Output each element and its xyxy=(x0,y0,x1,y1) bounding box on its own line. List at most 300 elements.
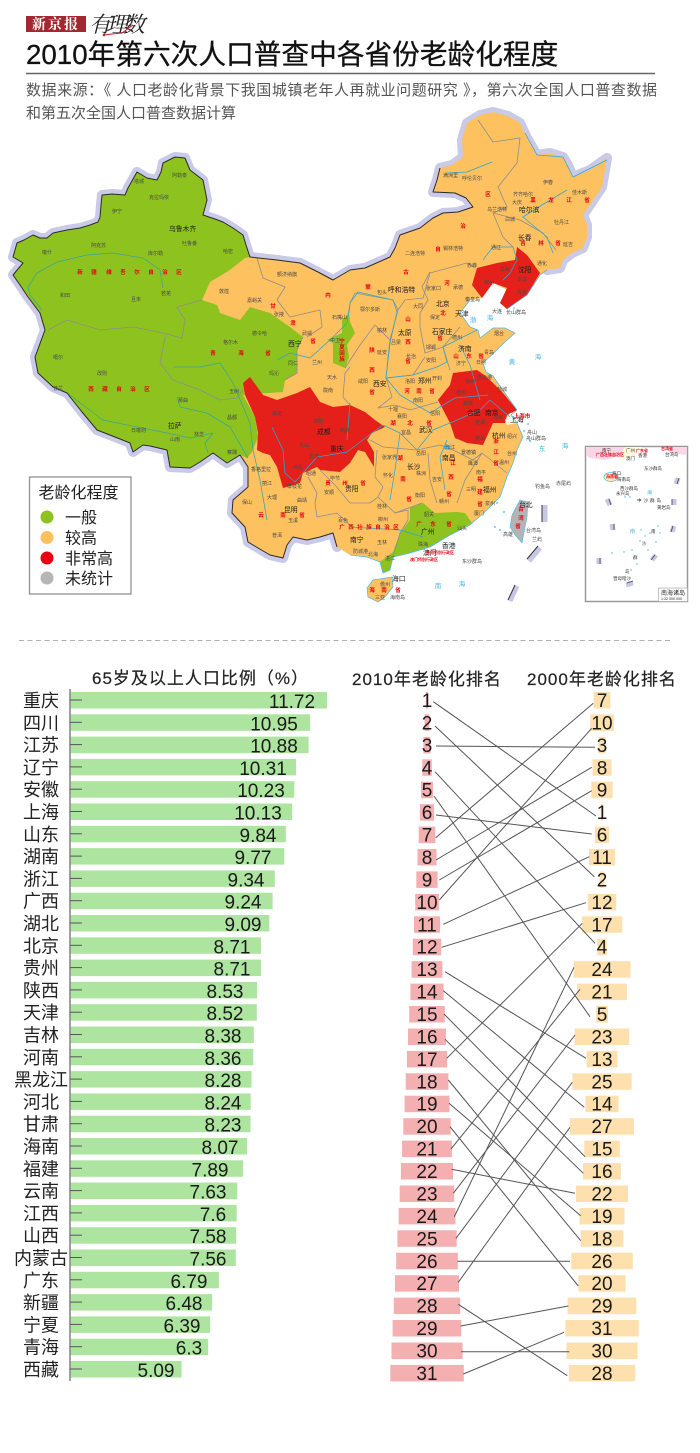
province labels: 湖南 xyxy=(23,847,59,867)
rank 2010 numbers: 8 xyxy=(422,848,432,869)
value labels: 10.88 xyxy=(250,737,298,758)
map: city labels: 赣州 xyxy=(439,498,449,505)
inset map: South China Sea islands: 广西壮族自治区 xyxy=(596,451,624,457)
value labels: 10.23 xyxy=(237,781,285,802)
rank 2010 numbers: 23 xyxy=(416,1184,438,1206)
inset map: South China Sea islands: 澳门 xyxy=(626,455,635,462)
map: city labels: 长沙 xyxy=(407,462,421,471)
value labels: 5.09 xyxy=(138,1361,174,1382)
province labels: 天津 xyxy=(23,1003,59,1023)
rank 2010 numbers: 4 xyxy=(422,758,433,779)
map: city labels: 库尔勒 xyxy=(148,250,163,257)
map land: higher aged provinces (orange) xyxy=(13,112,607,573)
map: province names in red: 云 xyxy=(258,512,264,519)
map: province names in red: 南 xyxy=(416,387,422,395)
rank 2000 numbers: 27 xyxy=(591,1117,613,1138)
map: province names in red: 自 xyxy=(116,385,122,393)
value labels: 11.72 xyxy=(269,692,315,713)
map: city labels: 沈阳 xyxy=(518,265,532,274)
map: sea labels xyxy=(435,313,569,590)
logo: newspaper masthead xyxy=(26,12,150,37)
map: province names in red: 西 xyxy=(448,474,454,481)
map: city labels: 山南 xyxy=(170,436,180,443)
value labels: 6.39 xyxy=(164,1316,200,1337)
logo: newspaper masthead: 新京报 xyxy=(32,16,80,33)
map: city labels: 德州 xyxy=(452,334,462,341)
map: province names in red: 省 xyxy=(299,511,305,519)
map: city labels xyxy=(42,172,587,601)
rank 2010 numbers: 26 xyxy=(416,1252,438,1273)
inset map: South China Sea islands: 永兴岛 xyxy=(616,490,630,497)
map: city labels: 景德镇 xyxy=(461,449,476,456)
map: city labels: 普洱 xyxy=(272,532,282,539)
map: province names in red: 尔 xyxy=(134,268,140,276)
map: province names in red: 省 xyxy=(369,388,375,396)
map: province names in red: 东 xyxy=(430,520,436,528)
map: province names in red: 龙 xyxy=(548,196,554,204)
inset map: South China Sea islands: 海 xyxy=(647,489,652,496)
map: sea labels: 渤 xyxy=(470,315,477,324)
map: city labels: 太原 xyxy=(398,328,412,337)
map: province names in red: 吉 xyxy=(520,239,526,247)
legend item: higher: 较高 xyxy=(65,530,97,548)
map: province names in red: 内 xyxy=(325,291,331,299)
map: city labels: 南京 xyxy=(485,408,499,417)
map: province names in red: 甘 xyxy=(270,302,276,310)
map: city labels: 额济纳旗 xyxy=(277,271,297,278)
value labels: 8.07 xyxy=(202,1138,238,1159)
map: city labels: 防城港 xyxy=(353,548,368,555)
map: province names in red: 吾 xyxy=(120,269,126,276)
province labels: 江苏 xyxy=(23,736,59,756)
map: city labels: 长治 xyxy=(406,353,416,360)
map: land border line xyxy=(13,157,473,558)
map: city labels: 昆明 xyxy=(284,506,298,514)
map: city labels: 三明 xyxy=(466,487,476,493)
province labels: 湖北 xyxy=(23,914,59,934)
map: province names in red: 治 xyxy=(130,385,136,393)
province labels: 贵州 xyxy=(23,959,59,979)
map: city labels: 锦州 xyxy=(484,279,494,286)
map: city labels: 香格里拉 xyxy=(251,466,271,473)
map: city labels: 陇南 xyxy=(323,387,333,394)
rank 2010 numbers: 20 xyxy=(416,1117,438,1138)
rank 2010 numbers: 7 xyxy=(422,826,432,847)
map: province names in red: 江 xyxy=(450,459,456,467)
value labels: 7.89 xyxy=(192,1160,228,1181)
map: province names in red: 贵 xyxy=(325,479,331,487)
map: province names in red: 省 xyxy=(265,349,271,357)
province labels xyxy=(14,691,68,1380)
map: province names in red: 西 xyxy=(348,524,354,531)
map: province names in red: 省 xyxy=(429,387,435,395)
map: province names in red: 区 xyxy=(393,524,399,531)
map: city labels: 天水 xyxy=(327,374,337,381)
map: city labels: 北海 xyxy=(368,551,378,558)
map: city labels: 汕头 xyxy=(457,525,467,532)
map: city labels: 舟山 xyxy=(527,429,537,436)
map: city labels: 大理 xyxy=(267,494,277,501)
map: city labels: 西宁 xyxy=(288,339,302,348)
map: city labels: 伊宁 xyxy=(112,208,122,215)
inset map: South China Sea islands: 沙 xyxy=(642,541,647,546)
map: city labels: 怀化 xyxy=(383,472,393,479)
rank 2000 numbers: 6 xyxy=(597,826,607,847)
map: province names in red: 河 xyxy=(404,387,410,395)
map: province names in red: 治 xyxy=(162,268,168,276)
map: province names in red: 浙 xyxy=(493,437,499,445)
value labels: 8.71 xyxy=(214,960,250,981)
axis and ticks xyxy=(70,689,82,1381)
map: province names in red: 省 xyxy=(584,196,590,204)
inset map: South China Sea islands: 南 xyxy=(630,528,635,535)
value labels: 8.23 xyxy=(205,1116,241,1137)
rank 2000 numbers: 3 xyxy=(597,736,607,757)
rank 2010 numbers: 24 xyxy=(416,1207,438,1228)
map: province names in red: 香港特别行政区 xyxy=(426,549,454,555)
map: province names in red: 陕 xyxy=(369,346,375,354)
map: province names in red: 西 xyxy=(369,367,375,374)
map: city labels: 北京 xyxy=(436,299,450,308)
map: city labels: 台北 xyxy=(519,500,533,509)
map: city labels: 重庆 xyxy=(330,444,344,453)
map: city labels: 林芝 xyxy=(194,431,204,438)
province labels: 江西 xyxy=(23,1204,59,1224)
map: province names in red: 区 xyxy=(176,269,182,276)
province labels: 内蒙古 xyxy=(14,1248,68,1268)
map: city labels: 黄山 xyxy=(475,435,485,442)
map: city labels: 通辽 xyxy=(491,244,501,251)
rank 2000 numbers: 29 xyxy=(591,1297,613,1318)
map: city labels: 岳阳 xyxy=(416,450,426,457)
rank 2010 numbers xyxy=(416,691,438,1385)
map: city labels: 柳州 xyxy=(378,516,388,523)
province labels: 广西 xyxy=(23,892,59,912)
map: province names in red: 省 xyxy=(493,459,499,467)
rank 2000 numbers: 20 xyxy=(591,1274,613,1295)
legend item: not counted: 未统计 xyxy=(65,570,113,588)
value labels: 7.63 xyxy=(190,1183,226,1204)
inset map: South China Sea islands: 东沙群岛 xyxy=(644,465,662,472)
map: province names in red: 自 xyxy=(375,523,381,531)
map: city labels: 南昌 xyxy=(442,453,456,462)
map: city labels: 呼伦贝尔 xyxy=(462,175,482,182)
map: province names in red: 福 xyxy=(477,475,483,483)
rank 2010 numbers: 30 xyxy=(416,1342,438,1362)
inset map: South China Sea islands: 海南岛 xyxy=(617,476,631,483)
rank 2000 numbers: 14 xyxy=(591,1095,613,1116)
map: province names in red: 西 xyxy=(405,339,411,346)
map: city labels: 拉萨 xyxy=(168,421,182,430)
rank 2010 numbers: 11 xyxy=(417,915,437,936)
map: city labels: 温州 xyxy=(499,459,509,466)
map: city labels: 中卫 xyxy=(330,337,340,344)
legend: ageing level: 老龄化程度 xyxy=(38,484,119,502)
map: city labels: 玛沁 xyxy=(269,370,279,377)
rank 2000 numbers: 18 xyxy=(591,1229,613,1250)
map: city labels: 蚌埠 xyxy=(463,400,473,407)
map: province names in red: 族 xyxy=(366,523,372,531)
map: province names in red: 治 xyxy=(460,222,466,230)
map: city labels: 绍兴 xyxy=(507,433,517,440)
map: city labels: 和田 xyxy=(60,292,70,299)
rank 2000 numbers: 5 xyxy=(597,1005,607,1026)
map: sea labels: 海 xyxy=(459,579,466,588)
map: province names in red: 山 xyxy=(405,315,411,323)
map: province names in red: 回 xyxy=(339,350,345,357)
map: province names in red: 广 xyxy=(339,523,345,531)
map: city labels: 佳木斯 xyxy=(572,189,587,196)
inset map: South China Sea islands: 南 xyxy=(651,528,656,534)
inset map: South China Sea islands: 南宁 xyxy=(602,447,611,453)
map: province names in red: 台 xyxy=(518,505,524,513)
map: province names in red: 黑 xyxy=(530,197,536,204)
map: city labels: 鄂尔多斯 xyxy=(360,306,380,313)
rank 2010 numbers: 2 xyxy=(422,713,432,734)
legend item: ordinary: 一般 xyxy=(65,509,97,527)
map: city labels: 通化 xyxy=(537,260,547,267)
map: province names in red: 东 xyxy=(466,352,472,360)
map: city labels: 连云港 xyxy=(477,374,492,381)
map: city labels: 阿克苏 xyxy=(91,242,106,249)
map: city labels: 哈密 xyxy=(223,248,233,255)
map: city labels: 福州 xyxy=(483,485,497,494)
map: city labels: 株洲 xyxy=(416,470,426,477)
rank 2010 numbers: 10 xyxy=(416,893,438,914)
value labels: 6.48 xyxy=(166,1294,202,1315)
map: city labels: 吐鲁番 xyxy=(182,240,197,247)
rank 2010 numbers: 19 xyxy=(416,1095,438,1116)
map: city labels: 大庆 xyxy=(512,199,522,206)
map: city labels: 日喀则 xyxy=(131,427,146,434)
map: province names in red: 上海市 xyxy=(514,412,531,420)
province labels: 浙江 xyxy=(23,869,59,889)
rank 2010 numbers: 5 xyxy=(422,781,432,802)
map: city labels: 百色 xyxy=(338,517,348,524)
map: city labels: 鹰潭 xyxy=(468,460,478,467)
province labels: 山东 xyxy=(23,825,59,845)
province labels: 四川 xyxy=(23,713,59,733)
rank 2000 numbers: 31 xyxy=(591,1319,613,1340)
map: city labels: 曲靖 xyxy=(297,497,307,504)
title: 2010年第六次人口普查中各省份老龄化程度 xyxy=(26,39,558,70)
map: city labels: 苏州 xyxy=(493,414,503,421)
map: city labels: 韶关 xyxy=(424,511,434,518)
map: province names in red: 南 xyxy=(400,475,406,483)
map: province names in red: 南 xyxy=(381,586,387,594)
province labels: 青海 xyxy=(23,1338,59,1358)
rank 2000 numbers: 2 xyxy=(597,870,607,891)
map: province names in red: 蒙 xyxy=(365,283,371,291)
province labels: 甘肃 xyxy=(23,1115,59,1135)
map: city labels: 克拉玛依 xyxy=(149,194,169,201)
value labels: 8.24 xyxy=(205,1093,242,1114)
source note: 数据来源：《 人口老龄化背景下我国城镇老年人再就业问题研究 》，第六次全国人口普查数据 xyxy=(26,81,657,99)
value labels: 6.79 xyxy=(171,1272,207,1293)
map: province names in red: 肃 xyxy=(290,319,296,327)
inset map: South China Sea islands: 台湾岛 xyxy=(665,451,679,458)
map: city labels: 赤峰 xyxy=(467,262,477,269)
map: province names in red: 州 xyxy=(342,480,348,487)
province labels: 吉林 xyxy=(23,1026,59,1046)
map: province names in red: 林 xyxy=(538,239,544,247)
map: city labels: 张家界 xyxy=(382,454,397,461)
province labels: 辽宁 xyxy=(23,758,59,778)
rank 2010 numbers: 28 xyxy=(416,1297,438,1318)
map: city labels: 台湾岛 xyxy=(526,527,541,534)
map: city labels: 西昌 xyxy=(293,465,303,471)
map: city labels: 桂林 xyxy=(377,503,387,510)
province labels: 黑龙江 xyxy=(14,1070,68,1090)
map: city labels: 徐州 xyxy=(465,378,475,385)
map: province names in red: 省 xyxy=(405,357,411,365)
legend item: very high: 非常高 xyxy=(65,550,113,568)
rank 2010 numbers: 25 xyxy=(416,1229,438,1250)
province labels: 新疆 xyxy=(23,1293,59,1313)
map: city labels: 大同 xyxy=(413,303,423,310)
inset map: South China Sea islands: 群 xyxy=(633,554,638,561)
value labels: 9.77 xyxy=(235,848,271,869)
map: city labels: 乐山 xyxy=(299,442,309,449)
map: rivers xyxy=(28,133,607,573)
map: city labels: 丽江 xyxy=(262,480,272,487)
rank 2000 numbers: 30 xyxy=(591,1342,613,1362)
map: city labels: 呼和浩特 xyxy=(388,285,415,294)
rank 2010 numbers: 22 xyxy=(416,1162,438,1183)
map: city labels: 西安 xyxy=(373,379,387,388)
value labels: 9.24 xyxy=(225,893,262,914)
value labels: 8.36 xyxy=(205,1049,241,1070)
province labels: 福建 xyxy=(23,1159,59,1179)
rank 2000 numbers: 15 xyxy=(591,1140,613,1161)
map: city labels: 塔城 xyxy=(134,178,144,185)
rank 2000 heading: 2000年老龄化排名 xyxy=(527,670,677,689)
map: city labels: 衡阳 xyxy=(415,492,425,499)
inset map: South China Sea islands: 中沙群岛 xyxy=(637,497,663,504)
map: city labels: 大连 xyxy=(492,308,502,315)
value labels: 6.3 xyxy=(176,1339,202,1360)
map: province names in red: 省 xyxy=(310,337,316,345)
province labels: 北京 xyxy=(23,936,59,956)
map: province names in red: 省 xyxy=(515,522,521,530)
map: city labels: 兰屿 xyxy=(532,536,542,543)
map: city labels: 长山群岛 xyxy=(506,309,526,316)
rank 2000 numbers: 1 xyxy=(597,803,607,824)
map: Anhui and Jiangsu red xyxy=(438,370,517,445)
map: province names in red: 西 xyxy=(88,386,94,393)
map: Guangdong green xyxy=(380,503,472,573)
value labels: 8.52 xyxy=(207,1004,243,1025)
rank 2010 numbers: 15 xyxy=(416,1005,438,1026)
map: province names in red: 自 xyxy=(435,245,441,253)
map: city labels: 玉林 xyxy=(377,539,387,546)
map: city labels: 安阳 xyxy=(426,357,436,364)
map: city labels: 成都 xyxy=(317,427,331,436)
map: city labels: 乌鲁木齐 xyxy=(169,224,196,233)
map: city labels: 满洲里 xyxy=(443,172,458,179)
province labels: 海南 xyxy=(23,1137,59,1157)
map: sea labels: 南 xyxy=(435,581,442,590)
map: city labels: 上海 xyxy=(510,415,524,424)
rank 2000 numbers: 25 xyxy=(591,1072,613,1093)
map: city labels: 丹东 xyxy=(517,289,527,296)
map: city labels: 石家庄 xyxy=(432,327,453,336)
map: city labels: 南宁 xyxy=(350,535,364,544)
map: Sichuan and Chongqing red xyxy=(243,377,385,488)
map: province borders xyxy=(48,120,556,557)
map: province names in red: 省 xyxy=(555,239,561,247)
map: city labels: 南平 xyxy=(476,469,486,476)
inset map: South China Sea islands: 广东省 xyxy=(636,447,648,453)
map: city labels: 绵阳 xyxy=(313,418,323,425)
map: province names in red: 建 xyxy=(477,488,483,496)
map: city labels: 阜新 xyxy=(500,266,510,273)
map: city labels: 喀什 xyxy=(42,249,52,256)
map: city labels: 珠海 xyxy=(418,541,428,548)
rank change connector lines xyxy=(433,702,596,1376)
map: city labels: 伊春 xyxy=(543,179,553,186)
map: city labels: 武威 xyxy=(302,330,312,337)
logo: newspaper masthead: 有理数 xyxy=(88,12,150,37)
rank 2000 numbers: 28 xyxy=(591,1364,613,1385)
map: city labels: 湛江 xyxy=(385,555,395,562)
map: province names in red: 青 xyxy=(210,349,216,357)
map: city labels: 那曲 xyxy=(178,397,188,404)
map: city labels: 且末 xyxy=(131,296,141,303)
rank 2000 numbers: 16 xyxy=(591,1162,613,1183)
map: city labels: 阿勒泰 xyxy=(172,172,187,179)
inset map: South China Sea islands: 海南省 xyxy=(606,473,618,479)
inset map: South China Sea islands: 1:32 000 000 xyxy=(661,597,682,601)
map: city labels: 芜湖 xyxy=(475,419,485,426)
map: city labels: 石嘴山 xyxy=(332,314,347,321)
map: city labels: 二连浩特 xyxy=(405,250,425,257)
province labels: 陕西 xyxy=(23,981,59,1001)
map: province names in red: 省 xyxy=(406,495,412,503)
rank 2010 numbers: 3 xyxy=(422,736,432,757)
province labels: 河北 xyxy=(23,1092,59,1112)
map: city labels: 武汉 xyxy=(419,425,433,434)
map: city labels: 兰州 xyxy=(312,359,322,366)
map: province names in red: 壮 xyxy=(357,523,363,531)
map: province names in red: 维 xyxy=(106,268,112,276)
map: city labels: 包头 xyxy=(377,289,387,296)
rank 2000 numbers: 26 xyxy=(591,1252,613,1273)
map: province names in red: 湾 xyxy=(518,514,524,522)
rank 2000 numbers: 17 xyxy=(591,915,613,936)
value labels: 7.58 xyxy=(190,1227,226,1248)
map: province names in red: 省 xyxy=(446,490,452,498)
province labels: 安徽 xyxy=(23,780,59,800)
map: province names in red: 藏 xyxy=(102,385,108,393)
map: city labels: 玉树 xyxy=(229,388,239,395)
map: province names in red: 河 xyxy=(444,279,450,287)
map: city labels: 牡丹江 xyxy=(554,219,569,226)
map: western green provinces xyxy=(13,157,303,468)
rank 2010 numbers: 21 xyxy=(416,1140,438,1161)
province labels: 山西 xyxy=(23,1226,59,1246)
map: province names in red: 湖 xyxy=(390,419,396,427)
map: city labels: 烟台 xyxy=(494,330,504,337)
map: province names in red: 区 xyxy=(485,191,491,198)
map: city labels: 格尔木 xyxy=(223,339,238,346)
map: city labels: 邯郸 xyxy=(426,344,436,351)
map: city labels: 白城 xyxy=(505,216,515,223)
rank 2000 numbers: 12 xyxy=(591,893,613,914)
map: city labels: 海南岛 xyxy=(390,594,405,601)
map: city labels: 台州 xyxy=(507,450,517,457)
map: city labels: 盐城 xyxy=(497,386,507,393)
